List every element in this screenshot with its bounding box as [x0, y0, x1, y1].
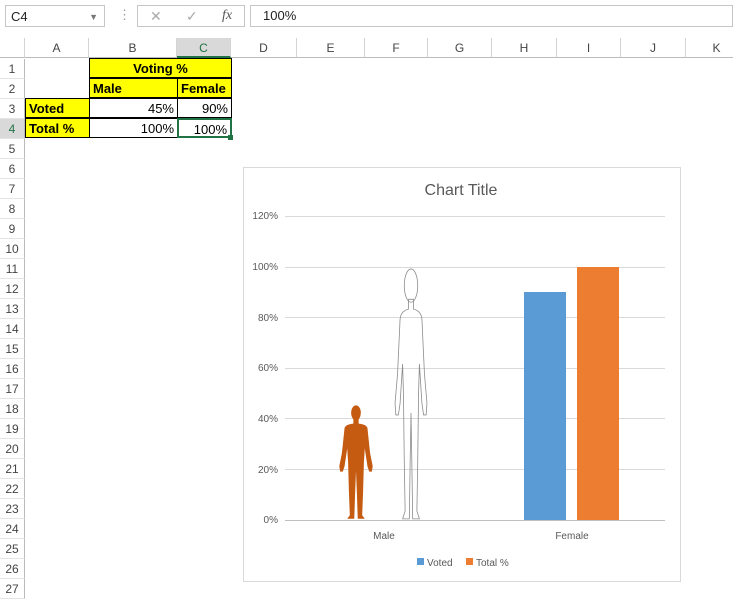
gridlines and y-axis: 60%	[258, 363, 278, 374]
gridlines and y-axis: 80%	[258, 313, 278, 324]
x-axis labels: Male	[373, 531, 395, 542]
text: J	[650, 41, 656, 55]
text: 1	[9, 62, 15, 76]
text: 4	[9, 122, 15, 136]
legend	[417, 558, 509, 569]
formula buttons: ✓	[186, 8, 198, 24]
gridlines and y-axis	[252, 211, 665, 526]
text: 7	[9, 182, 15, 196]
gridlines and y-axis: 20%	[258, 465, 278, 476]
text: 12	[5, 282, 19, 296]
x-axis labels: Female	[555, 531, 589, 542]
text: D	[259, 41, 268, 55]
text: 25	[5, 542, 19, 556]
text: 13	[5, 302, 19, 316]
formula input: 100%	[263, 8, 296, 23]
bars: female	[524, 267, 619, 520]
data table: Total %	[29, 121, 74, 136]
text: 3	[9, 102, 15, 116]
gridlines and y-axis: 40%	[258, 414, 278, 425]
text: F	[392, 41, 400, 55]
text: E	[326, 41, 334, 55]
data table: 100%	[141, 121, 174, 136]
formula buttons: fx	[222, 8, 232, 23]
text: 19	[5, 422, 19, 436]
text: G	[455, 41, 464, 55]
text: H	[520, 41, 528, 55]
formula input	[250, 5, 733, 27]
data table: Voting %	[133, 61, 188, 76]
chart	[243, 167, 681, 582]
data table: Female	[181, 81, 226, 96]
name box	[5, 5, 105, 27]
x-axis labels	[373, 531, 589, 542]
data table: Voted	[29, 101, 64, 116]
legend: Voted	[427, 558, 453, 569]
text: 5	[9, 142, 15, 156]
formula buttons: ✕	[150, 8, 162, 24]
data table: 90%	[202, 101, 228, 116]
gridlines and y-axis: 100%	[252, 262, 278, 273]
column headers	[0, 38, 733, 58]
text: A	[52, 41, 60, 55]
text: 23	[5, 502, 19, 516]
data table: 100%	[194, 122, 227, 137]
formula buttons	[137, 5, 245, 27]
name box: ▼	[89, 12, 98, 22]
icon: male total outline figure	[395, 269, 427, 519]
text: 14	[5, 322, 19, 336]
text: 22	[5, 482, 19, 496]
icon: male voted figure	[339, 405, 373, 519]
text: 24	[5, 522, 19, 536]
legend: Total %	[476, 558, 509, 569]
text: K	[712, 41, 720, 55]
name box: C4	[11, 9, 28, 24]
text: B	[128, 41, 136, 55]
chart title: Chart Title	[425, 182, 498, 199]
gridlines and y-axis: 120%	[252, 211, 278, 222]
gridlines and y-axis: 0%	[264, 515, 278, 526]
text: 11	[6, 262, 18, 276]
formula bar	[0, 0, 733, 34]
text: 20	[5, 442, 19, 456]
text: 18	[5, 402, 19, 416]
text: C	[199, 41, 208, 55]
text: 2	[9, 82, 15, 96]
data table	[25, 58, 233, 140]
formula bar: ⋮	[118, 7, 131, 22]
text: 21	[5, 462, 19, 476]
text: 16	[5, 362, 19, 376]
data table: 45%	[148, 101, 174, 116]
row headers	[0, 59, 25, 599]
text: 9	[9, 222, 15, 236]
text: 26	[5, 562, 19, 576]
text: 6	[9, 162, 15, 176]
text: 27	[5, 582, 19, 596]
text: 15	[5, 342, 19, 356]
data table: Male	[93, 81, 122, 96]
text: 17	[5, 382, 19, 396]
text: 10	[5, 242, 19, 256]
text: I	[587, 41, 590, 55]
text: 8	[9, 202, 15, 216]
